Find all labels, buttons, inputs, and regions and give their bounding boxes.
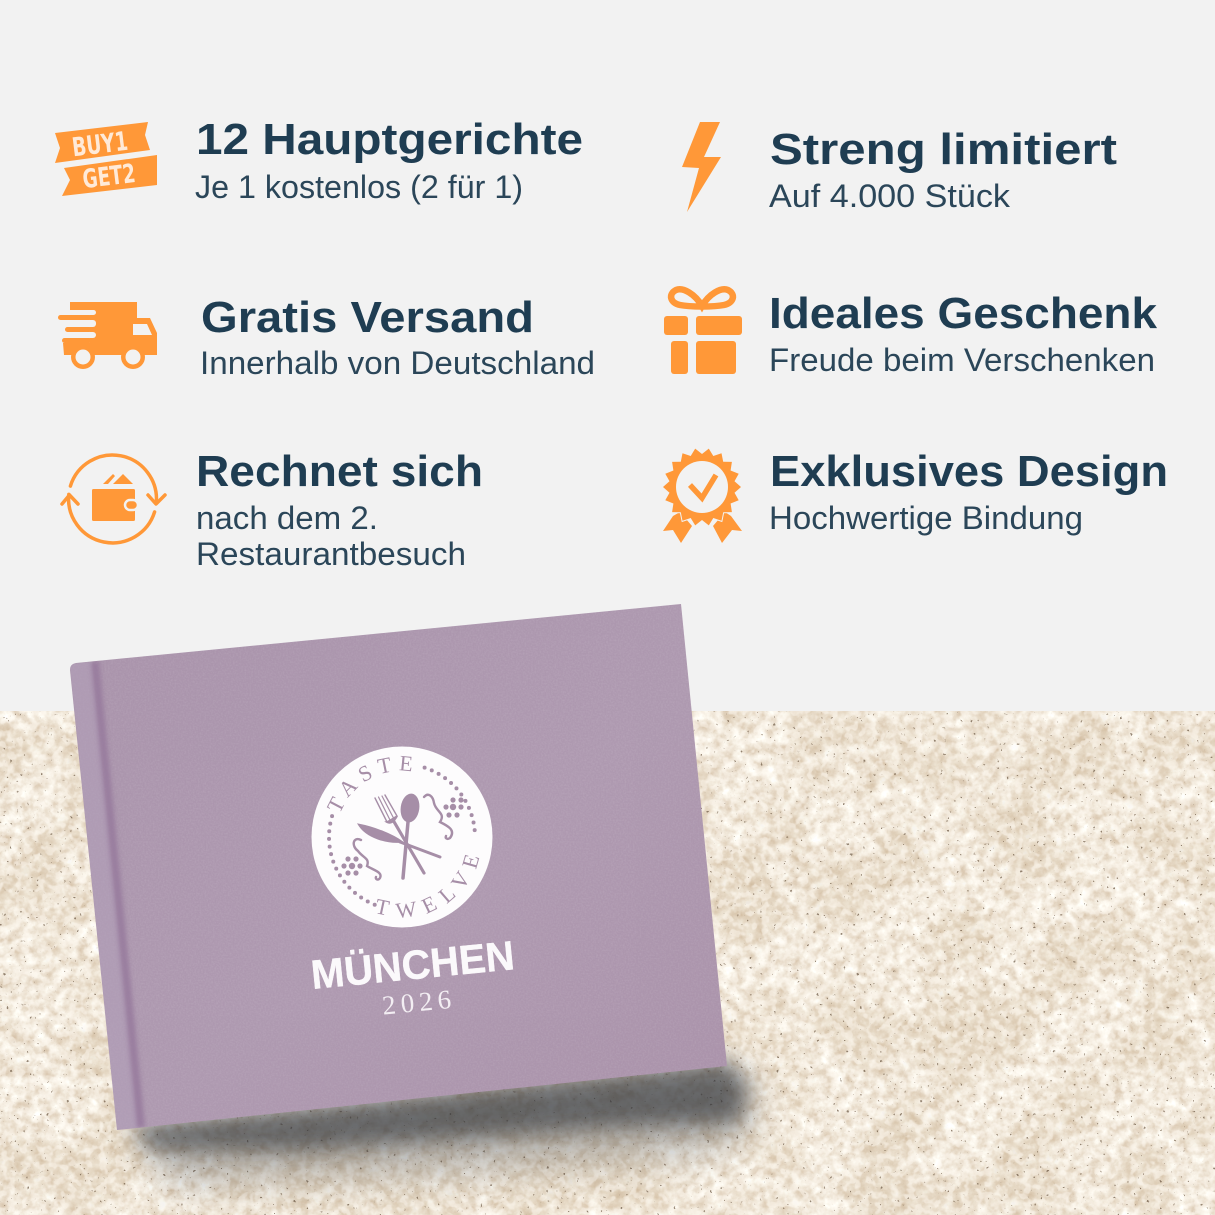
logo text: TWELVE: TWELVE (377, 854, 480, 918)
feature: Rechnet sich: Restaurantbesuch (196, 536, 466, 572)
book cover (70, 604, 727, 1130)
logo text: TASTE: TASTE (326, 756, 412, 812)
feature: Streng limitiert (769, 125, 1117, 214)
icon: award badge (663, 449, 742, 543)
feature: Ideales Geschenk: Ideales Geschenk (769, 289, 1158, 338)
feature: Exklusives Design (769, 447, 1168, 536)
icon: lightning bolt (682, 122, 721, 212)
icon: buy 1 get 2 (55, 122, 157, 196)
feature: Exklusives Design: Exklusives Design (770, 447, 1168, 496)
feature: 12 Hauptgerichte: Je 1 kostenlos (2 für 1) (195, 169, 523, 205)
stone surface (0, 711, 1215, 1215)
feature: Gratis Versand (200, 293, 595, 381)
icon: wallet with cycle arrows (62, 455, 165, 543)
icon: buy 1 get 2: BUY1 (70, 127, 130, 163)
logo seal (312, 746, 492, 928)
book shadow (130, 1060, 755, 1185)
dotted ring (329, 768, 475, 905)
feature: Rechnet sich: nach dem 2. (196, 500, 378, 536)
book (70, 604, 727, 1130)
crossed cutlery (358, 792, 440, 878)
feature: Gratis Versand: Innerhalb von Deutschland (200, 345, 595, 381)
flourishes and grapes (341, 795, 464, 880)
feature: Rechnet sich (196, 447, 483, 572)
book title: MÜNCHEN: MÜNCHEN (309, 932, 516, 998)
background (0, 0, 1215, 711)
book year: 2026: 2026 (381, 984, 457, 1021)
feature: Ideales Geschenk (769, 289, 1158, 378)
feature: Streng limitiert: Streng limitiert (770, 125, 1117, 174)
feature: Streng limitiert: Auf 4.000 Stück (769, 178, 1011, 214)
feature: Gratis Versand: Gratis Versand (201, 293, 534, 342)
icon: delivery truck (58, 302, 157, 369)
icon: gift (664, 289, 742, 374)
feature: Ideales Geschenk: Freude beim Verschenken (769, 342, 1155, 378)
feature: Exklusives Design: Hochwertige Bindung (769, 500, 1083, 536)
feature: Rechnet sich: Rechnet sich (196, 447, 483, 496)
feature: 12 Hauptgerichte: 12 Hauptgerichte (196, 115, 583, 164)
feature: 12 Hauptgerichte (195, 115, 583, 205)
icon: buy 1 get 2: GET2 (81, 159, 137, 195)
